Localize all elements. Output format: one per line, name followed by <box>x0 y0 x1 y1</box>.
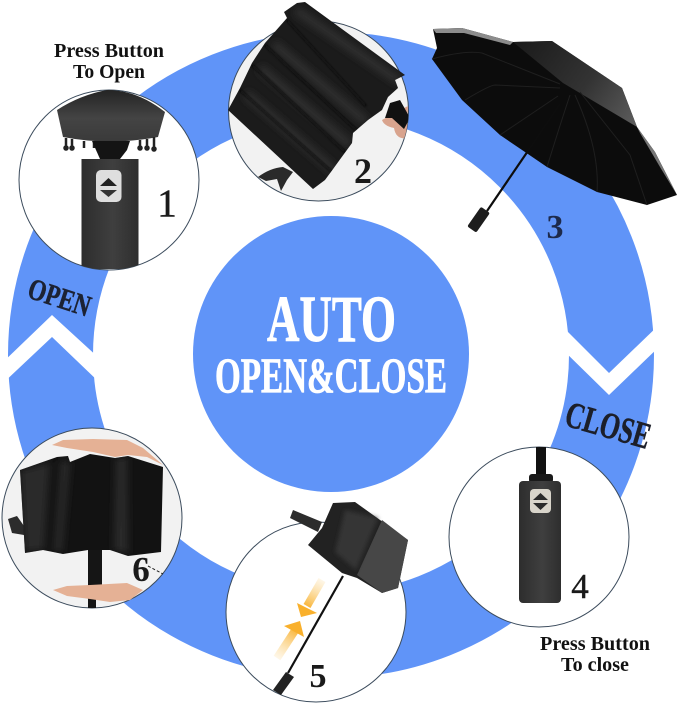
ribs <box>432 52 647 205</box>
handle grip <box>385 100 410 129</box>
shaft <box>487 104 560 211</box>
dashed leader <box>148 566 163 574</box>
bottom hand <box>53 583 143 602</box>
step 1 panel <box>19 90 199 270</box>
grip <box>467 207 490 233</box>
heading: open and close: OPEN&CLOSE <box>215 347 447 403</box>
step 6 panel <box>2 428 182 608</box>
handle <box>82 159 138 269</box>
collar <box>529 474 553 483</box>
step 5 panel <box>226 502 408 702</box>
half folded canopy <box>308 502 408 593</box>
step 4 panel <box>449 447 629 627</box>
shaft lower <box>88 596 96 608</box>
canopy light panel <box>357 520 408 593</box>
clasp <box>8 516 24 535</box>
number 5: 5 <box>310 658 326 695</box>
heading: auto: AUTO <box>267 283 396 356</box>
close chevron arrow <box>560 322 662 395</box>
caption: press button to close: To close <box>561 654 629 676</box>
caption: press button to close: Press Button <box>540 633 650 655</box>
number 4: 4 <box>571 567 589 606</box>
umbrella canopy top <box>57 90 165 142</box>
hand <box>382 106 408 138</box>
shaft upper <box>88 548 102 590</box>
shaft <box>288 576 343 673</box>
number 1: 1 <box>157 182 177 225</box>
canopy fold highlights <box>20 456 128 554</box>
hub <box>92 141 130 159</box>
number 3: 3 <box>546 209 564 246</box>
strap <box>258 167 293 191</box>
strap <box>290 510 322 532</box>
caption: press button to close <box>540 633 650 676</box>
arrow upper <box>297 580 322 617</box>
shaft <box>536 447 546 475</box>
step 3 open umbrella <box>432 28 677 246</box>
canopy mid shading <box>335 510 378 570</box>
center circle badge <box>193 216 469 492</box>
open button <box>96 170 122 202</box>
number 6: 6 <box>132 550 150 589</box>
caption: press button to open: Press Button <box>54 40 164 62</box>
label: open on ring: OPEN <box>24 272 95 324</box>
open chevron arrow <box>0 315 100 386</box>
close button <box>530 489 551 513</box>
canopy fold shades <box>240 10 400 172</box>
caption: press button to open <box>54 40 164 83</box>
number 2: 2 <box>354 151 372 191</box>
folded umbrella <box>228 2 405 189</box>
canopy top panel <box>513 41 637 127</box>
arrow lower <box>277 621 304 658</box>
caption: press button to open: To Open <box>73 61 145 83</box>
canopy top left edge <box>433 28 513 45</box>
canopy underside <box>432 28 677 205</box>
folded canopy <box>20 454 163 556</box>
closed handle <box>519 481 561 603</box>
blue process ring <box>50 74 612 636</box>
grip <box>273 672 294 695</box>
canopy right edge <box>637 127 677 195</box>
top hand <box>52 439 163 465</box>
rib tips <box>64 137 156 150</box>
step 2 panel <box>228 2 410 201</box>
